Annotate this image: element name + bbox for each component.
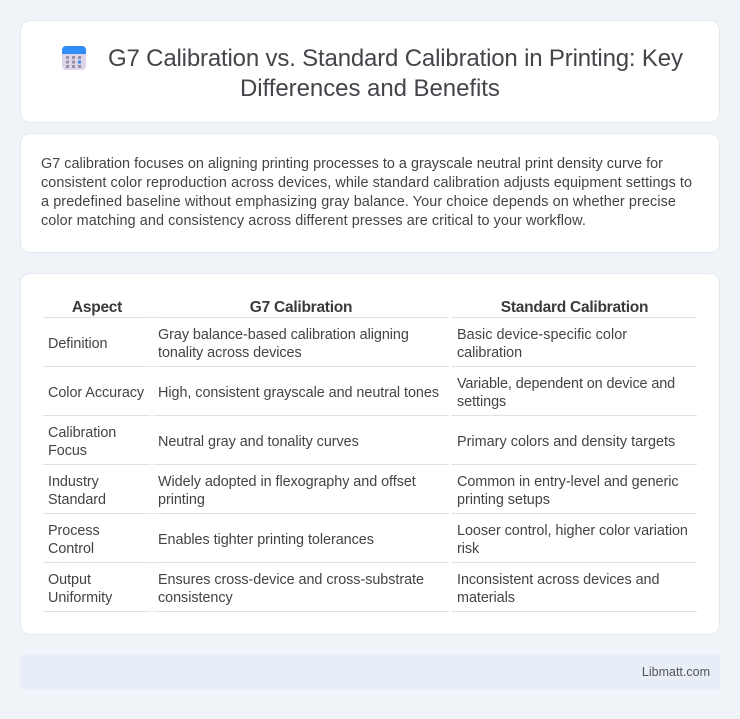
intro text: consistent color reproduction across devices, while standard calibration adjusts equipment settings to <box>41 175 692 191</box>
row: Definition: Gray balance-based calibration aligning <box>158 327 409 343</box>
row: Process Control: Looser control, higher color variation <box>457 523 688 539</box>
row: Process Control: Process <box>48 523 100 539</box>
row: Calibration Focus: Neutral gray and tonality curves <box>158 434 359 450</box>
row: Industry Standard: Widely adopted in flexography and offset <box>158 474 416 490</box>
title card <box>20 20 720 123</box>
row: Industry Standard: printing <box>158 492 205 508</box>
row: Industry Standard: Standard <box>48 492 106 508</box>
row: Industry Standard <box>48 474 679 508</box>
comparison table panel <box>20 273 720 635</box>
row: Output Uniformity <box>48 572 659 606</box>
row: Output Uniformity: consistency <box>158 590 233 606</box>
row: Industry Standard: Common in entry-level and generic <box>457 474 679 490</box>
row: Output Uniformity: materials <box>457 590 515 606</box>
row: Industry Standard: Industry <box>48 474 99 490</box>
row: Calibration Focus: Primary colors and density targets <box>457 434 675 450</box>
row: Calibration Focus: Focus <box>48 443 87 459</box>
intro text: a predefined baseline without emphasizing gray balance. Your choice depends on whether precise <box>41 194 676 210</box>
footer <box>20 655 720 689</box>
row: Color Accuracy <box>48 376 675 410</box>
row: Definition <box>48 327 627 361</box>
intro panel <box>20 133 720 253</box>
row: Color Accuracy: High, consistent grayscale and neutral tones <box>158 385 439 401</box>
row: Definition: Basic device-specific color <box>457 327 627 343</box>
row: Output Uniformity: Inconsistent across devices and <box>457 572 659 588</box>
row: Process Control <box>48 523 688 557</box>
row: Process Control: risk <box>457 541 479 557</box>
title <box>108 45 683 102</box>
table header: G7 Calibration <box>250 299 352 316</box>
row: Process Control: Control <box>48 541 94 557</box>
row: Color Accuracy: settings <box>457 394 506 410</box>
table header: Aspect <box>72 299 122 316</box>
footer text: Libmatt.com <box>642 665 710 679</box>
row: Industry Standard: printing setups <box>457 492 550 508</box>
intro text <box>41 156 692 229</box>
intro text: color matching and consistency across different presses are critical to your workflow. <box>41 213 586 229</box>
title: G7 Calibration vs. Standard Calibration in Printing: Key <box>108 45 683 72</box>
row: Output Uniformity: Output <box>48 572 91 588</box>
row: Calibration Focus <box>48 425 675 459</box>
row: Color Accuracy: Variable, dependent on device and <box>457 376 675 392</box>
title: Differences and Benefits <box>240 75 500 102</box>
row: Output Uniformity: Uniformity <box>48 590 112 606</box>
row: Process Control: Enables tighter printing tolerances <box>158 532 374 548</box>
row: Output Uniformity: Ensures cross-device and cross-substrate <box>158 572 424 588</box>
icon: calendar <box>62 46 86 70</box>
row: Calibration Focus: Calibration <box>48 425 116 441</box>
row: Definition: calibration <box>457 345 522 361</box>
row: Definition: tonality across devices <box>158 345 302 361</box>
row: Color Accuracy: Color Accuracy <box>48 385 144 401</box>
table header: Standard Calibration <box>501 299 648 316</box>
row: Definition: Definition <box>48 336 108 352</box>
table header <box>72 299 648 316</box>
intro text: G7 calibration focuses on aligning printing processes to a grayscale neutral print density curve for <box>41 156 663 172</box>
